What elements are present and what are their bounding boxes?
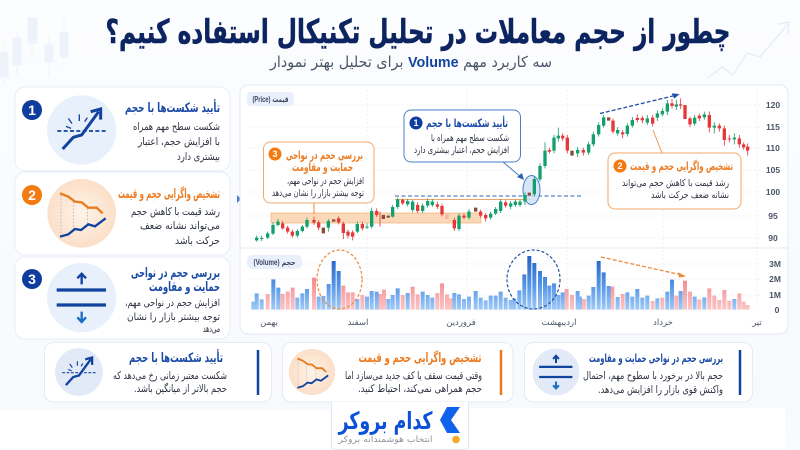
- dashed rising trend arrow: [600, 94, 678, 114]
- logo tagline: انتخاب هوشمندانه بروکر: [337, 435, 432, 445]
- icon: divergence lines: [47, 179, 116, 248]
- callout: support resistance: 3: [272, 149, 278, 159]
- month labels: خرداد: [653, 318, 673, 328]
- month labels: اسفند: [348, 318, 368, 328]
- panel: card 1 confirm breakouts: [15, 87, 230, 171]
- panel: card 3 support resistance: افزایش حجم در نواحی مهم،: [125, 298, 220, 309]
- panel: bottom card confirm breakouts: تأیید شکست‌ها با حجم: [129, 349, 223, 366]
- callout: support resistance: بررسی حجم در نواحی: [286, 148, 363, 163]
- price label: قیمت (Price): [252, 95, 288, 104]
- month labels: تیر: [751, 318, 762, 328]
- month labels: بهمن: [260, 318, 278, 328]
- logo: [332, 402, 468, 450]
- support zone: [271, 196, 583, 223]
- panel: card 2 divergence: [15, 172, 230, 255]
- month labels: فروردین: [446, 318, 476, 328]
- callout: support resistance: حمایت و مقاومت: [292, 160, 353, 175]
- price axis: [766, 100, 780, 243]
- badge 1: 1: [28, 102, 36, 118]
- month labels: [260, 318, 762, 328]
- callout: confirm breakouts: افزایش حجم، اعتبار بیشتری دارد: [414, 145, 509, 156]
- panel: card 2 divergence: می‌تواند نشانه ضعف: [140, 220, 220, 232]
- panel: bottom card confirm breakouts: حجم بالاتر از میانگین باشد.: [134, 382, 227, 395]
- panel: bottom card confirm breakouts: [44, 342, 272, 402]
- callout: divergence: رشد قیمت با کاهش حجم می‌تواند: [622, 178, 729, 189]
- panel: card 3 support resistance: حمایت و مقاومت: [149, 280, 220, 295]
- candlesticks part 2: [520, 98, 748, 207]
- background rising line decoration: [708, 22, 789, 78]
- panel: card 3 support resistance: توجه بیشتر بازار را نشان: [127, 312, 220, 323]
- breakout ellipse: [523, 176, 540, 204]
- callout: divergence: 2: [617, 161, 623, 171]
- callout: support resistance: [264, 142, 374, 214]
- volume axis: 1M: [769, 290, 781, 300]
- panel: card 1 confirm breakouts: شکست سطح مهم همراه: [133, 121, 220, 133]
- panel: bottom card confirm breakouts: شکست معتبر زمانی رخ می‌دهد که: [113, 370, 227, 382]
- icon: breakout arrow small: [55, 348, 103, 396]
- icon: levels small: [533, 349, 579, 395]
- badge 3: 3: [28, 271, 36, 287]
- badge 2: [22, 185, 42, 205]
- callout: confirm breakouts: تأیید شکست‌ها با حجم: [426, 115, 508, 130]
- callout: support resistance: افزایش حجم در نواحی مهم،: [287, 176, 364, 187]
- icon: divergence small: [289, 349, 335, 395]
- panel: bottom card support resistance: حجم بالا در برخورد با سطوح مهم، احتمال: [583, 370, 723, 382]
- blue dashed volume ellipse: [507, 250, 560, 309]
- badge 3: [22, 269, 42, 289]
- background candles decoration: [0, 12, 68, 85]
- icon: breakout arrow: [47, 95, 116, 165]
- panel: card 3 support resistance: بررسی حجم در نواحی: [131, 266, 220, 281]
- logo chevron: [440, 407, 460, 433]
- volume axis: [769, 259, 781, 315]
- orange dashed volume ellipse: [317, 250, 362, 309]
- panel: bottom card divergence: حجم همراهی نمی‌کند، احتیاط کنید.: [358, 383, 482, 395]
- logo dot: [452, 436, 460, 443]
- callout: divergence: [608, 130, 741, 209]
- badge 2: 2: [28, 187, 36, 203]
- panel: card 2 divergence: حرکت باشد: [175, 235, 220, 247]
- subtitle: سه کاربرد مهم Volume برای تحلیل بهتر نمودار: [269, 53, 552, 71]
- logo wordmark: کدام بروکر: [338, 407, 433, 435]
- price axis: 115: [766, 122, 780, 132]
- volume label: حجم (Volume): [254, 258, 296, 267]
- callout: divergence: نشانه ضعف حرکت باشد: [651, 190, 729, 201]
- price axis: 100: [766, 187, 780, 197]
- panel: card 2 divergence: تشخیص واگرایی حجم و قیمت: [118, 186, 220, 202]
- volume bars part 2: [514, 256, 748, 310]
- price axis: 105: [766, 165, 780, 175]
- panel: card 3 support resistance: می‌دهد: [203, 324, 220, 335]
- icon: levels with arrows: [47, 263, 116, 332]
- volume label: [247, 255, 302, 269]
- panel: bottom card divergence: وقتی قیمت سقف یا کف جدید می‌سازد اما: [345, 370, 482, 382]
- panel: bottom card divergence: [282, 342, 513, 402]
- callout: divergence: تشخیص واگرایی حجم و قیمت: [630, 159, 733, 174]
- panel: card 2 divergence: رشد قیمت با کاهش حجم: [131, 206, 220, 218]
- price axis: 95: [768, 211, 778, 221]
- callout: confirm breakouts: [404, 110, 524, 180]
- panel: chart: [240, 85, 788, 334]
- volume axis: 2M: [769, 274, 781, 284]
- badge 1: [22, 100, 42, 120]
- panel: bottom card support resistance: [524, 342, 752, 402]
- volume axis: 0: [775, 305, 780, 315]
- callout: support resistance: توجه بیشتر بازار را نشان می‌دهد: [272, 188, 364, 199]
- dashed falling volume arrow: [601, 257, 684, 277]
- price label: [247, 92, 294, 106]
- panel: bottom card support resistance: واکنش قوی بازار را افزایش می‌دهد.: [598, 384, 723, 396]
- price axis: 90: [768, 233, 778, 243]
- arrow: card to chart: [237, 195, 241, 203]
- callout: confirm breakouts: 1: [413, 118, 419, 128]
- panel: card 1 confirm breakouts: تأیید شکست‌ها با حجم: [125, 99, 220, 116]
- panel: card 1 confirm breakouts: بیشتری دارد: [177, 151, 220, 163]
- candlesticks part 1: [257, 198, 515, 242]
- volume bars part 1: [253, 261, 511, 310]
- panel: card 3 support resistance: [15, 257, 230, 339]
- panel: card 1 confirm breakouts: با افزایش حجم، اعتبار: [137, 136, 220, 148]
- price axis: 110: [766, 143, 780, 153]
- price axis: 120: [766, 100, 780, 110]
- callout: confirm breakouts: شکست سطح مهم همراه با: [431, 133, 509, 144]
- month labels: اردیبهشت: [541, 318, 577, 328]
- panel: bottom card divergence: تشخیص واگرایی حجم و قیمت: [358, 350, 482, 366]
- volume axis: 3M: [769, 259, 781, 269]
